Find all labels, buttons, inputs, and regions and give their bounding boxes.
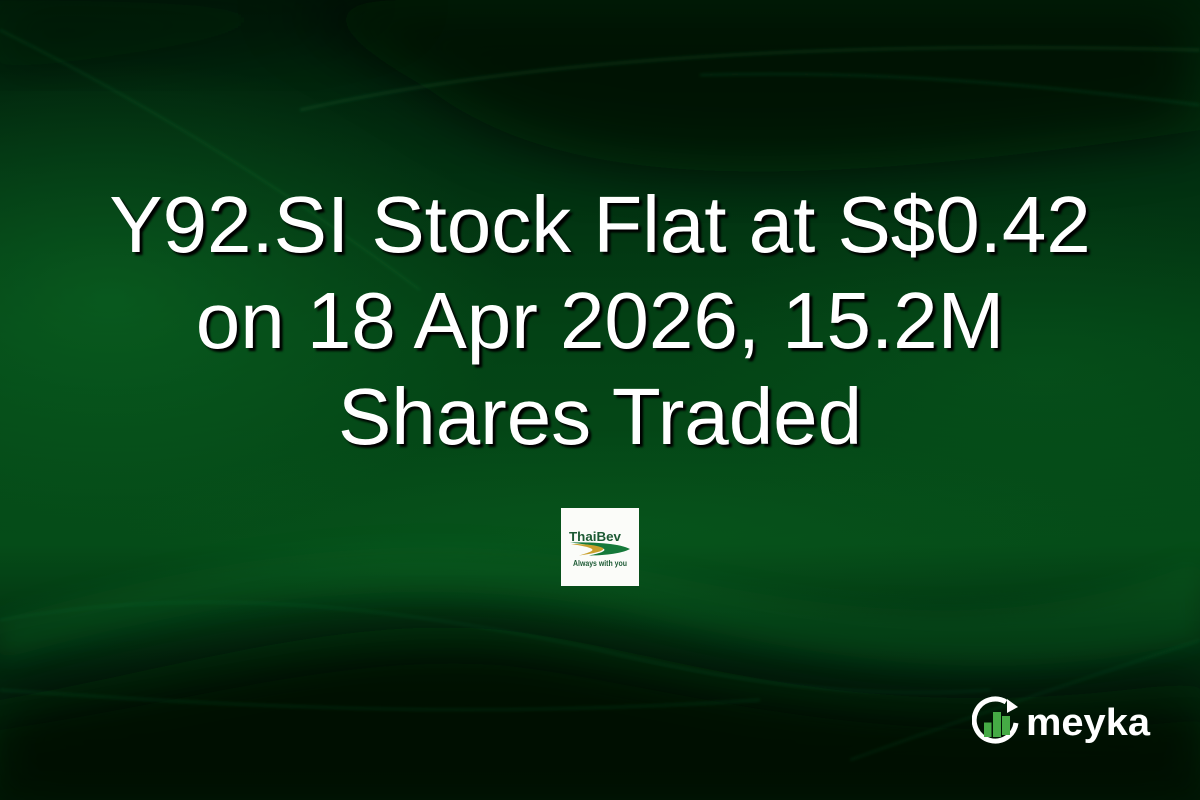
title: Y92.SI Stock Flat at S$0.42 — [109, 180, 1091, 269]
title: Shares Traded — [338, 372, 862, 461]
brand logo: meyka — [972, 696, 1151, 744]
title: on 18 Apr 2026, 15.2M — [196, 276, 1004, 365]
icon: ThaiBev company logo: Always with you — [573, 559, 627, 568]
icon: ThaiBev company logo: ThaiBev — [569, 529, 622, 544]
icon: ThaiBev company logo — [561, 508, 639, 586]
wordmark: meyka — [1026, 702, 1151, 744]
icon: circular arrow with bars — [974, 699, 1018, 741]
title — [109, 180, 1091, 461]
